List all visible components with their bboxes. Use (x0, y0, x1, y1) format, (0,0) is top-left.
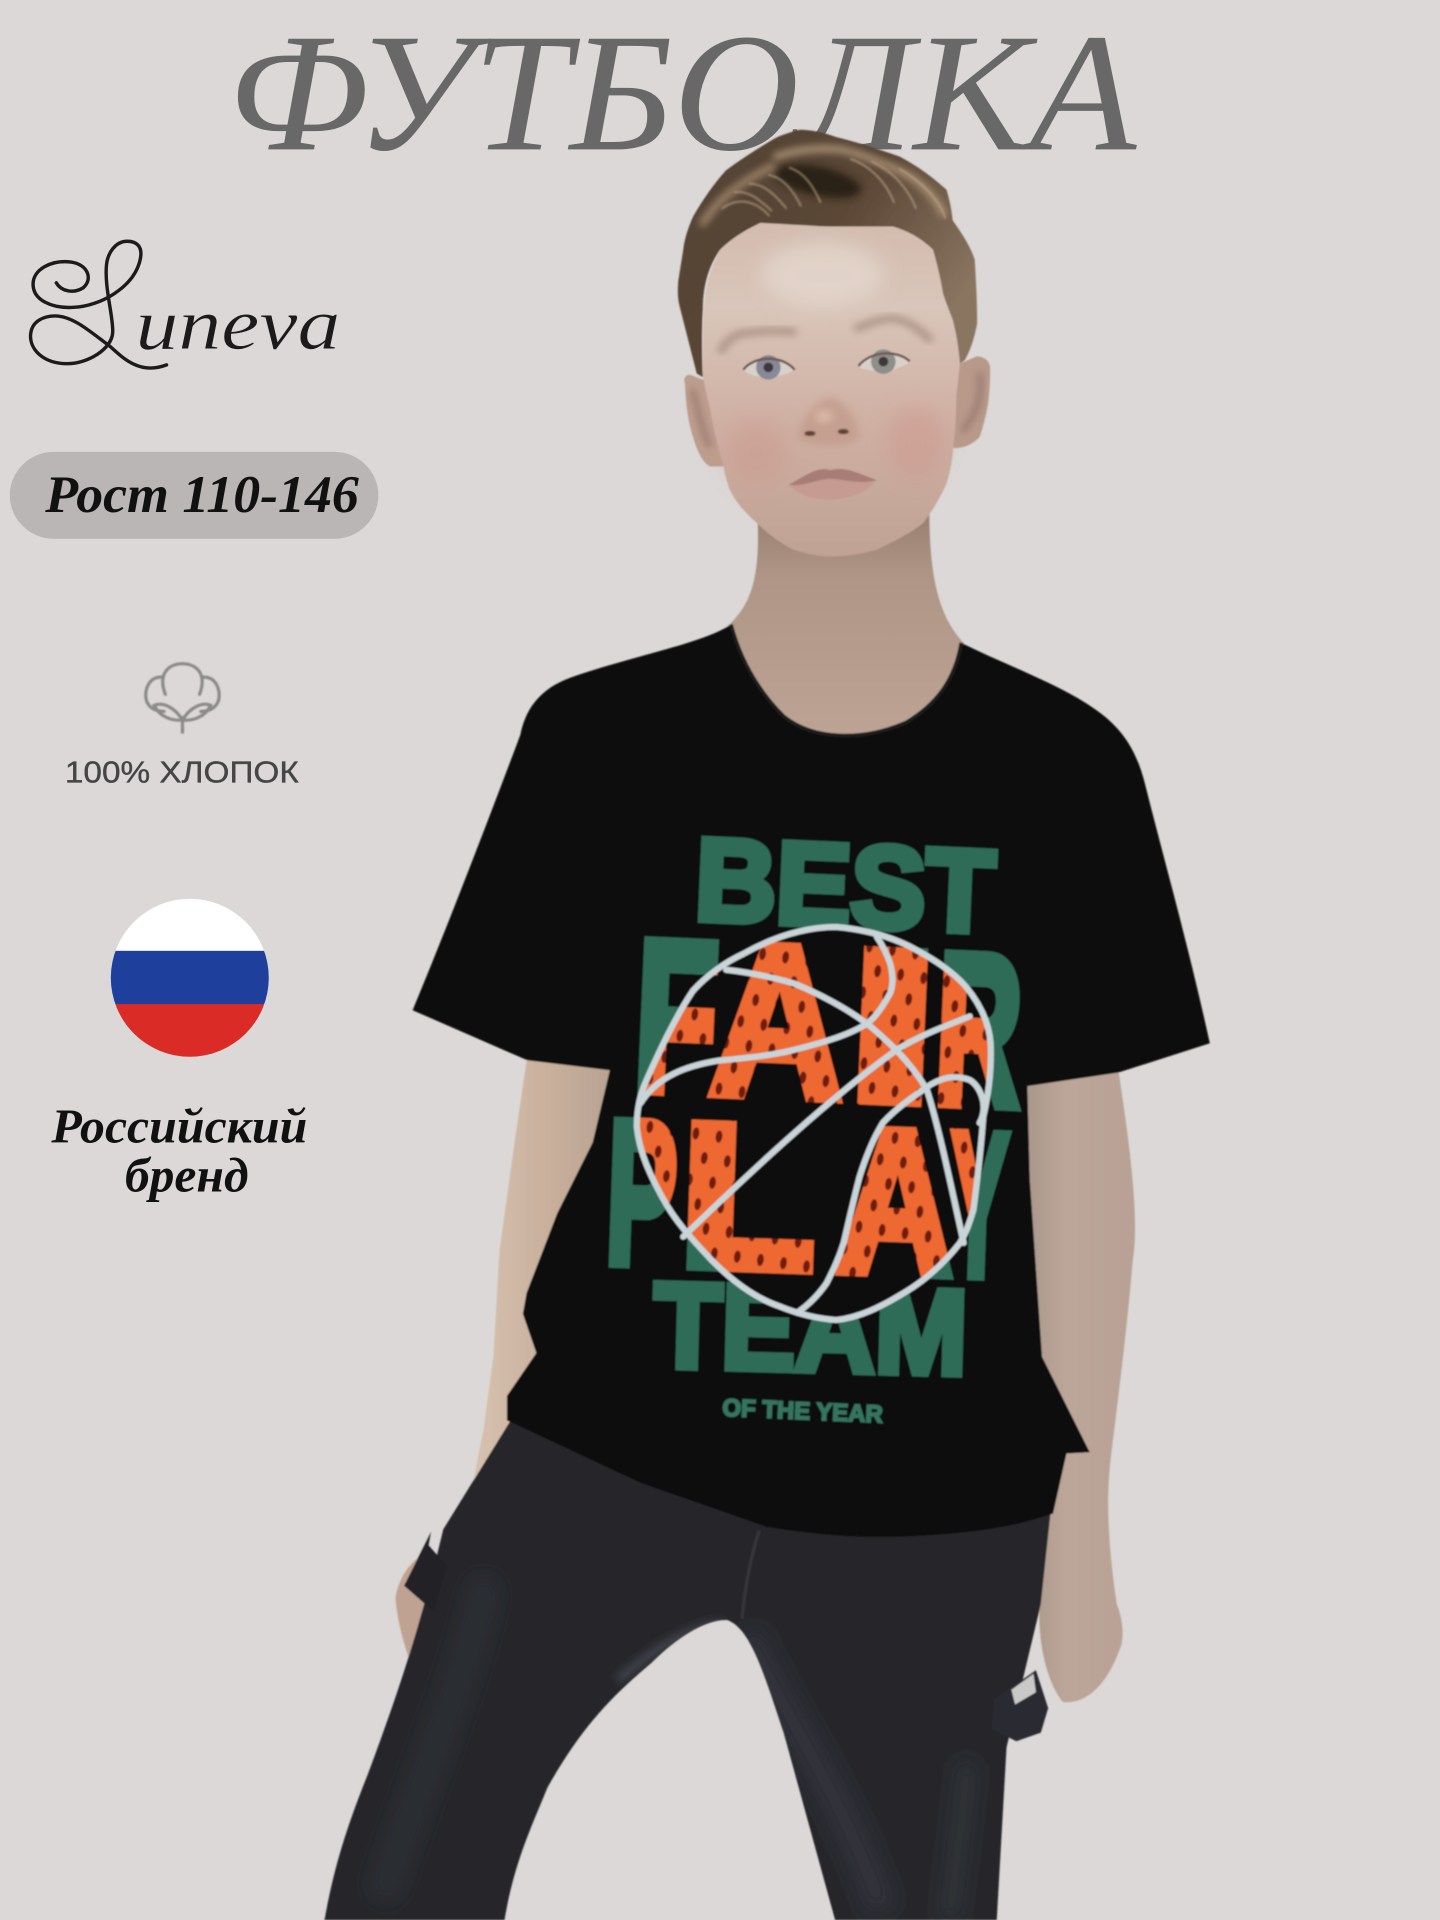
print: fair green: A (708, 900, 849, 1144)
print: fair orange: I (844, 906, 942, 1148)
cheeks (725, 419, 789, 487)
height badge (10, 452, 378, 539)
print: play orange: A (836, 1087, 958, 1317)
nose (797, 397, 860, 446)
print: fair green: I (844, 906, 942, 1148)
hair shading and strands (703, 149, 945, 223)
hair (678, 130, 977, 377)
print: fair orange: R (932, 910, 1026, 1151)
boy figure (324, 130, 1210, 1920)
brand logo: Luneva (134, 284, 340, 365)
height badge: Рост 110-146 (44, 466, 359, 524)
print: play green: L (677, 1081, 819, 1312)
left hand (396, 1555, 447, 1696)
cotton badge (65, 664, 299, 789)
russian brand text: Российский (50, 1098, 307, 1153)
print: fair orange: F (631, 897, 722, 1138)
lips (789, 469, 877, 500)
print: fair orange: A (708, 900, 849, 1144)
print: fair green: F (631, 897, 722, 1138)
icon: cotton (146, 664, 219, 732)
ears (684, 356, 990, 467)
t-shirt (413, 624, 1210, 1537)
title: ФУТБОЛКА (228, 0, 1137, 186)
left pocket flap (404, 1532, 447, 1611)
basketball (604, 897, 1026, 1320)
print: best: BEST (693, 814, 997, 957)
cotton label: 100% ХЛОПОК (65, 755, 299, 789)
ball seams (637, 927, 991, 1320)
neck and chest (722, 502, 970, 747)
print: play green: A (836, 1087, 958, 1317)
left arm (470, 1053, 612, 1496)
russian flag (108, 896, 272, 1059)
shirt print: Y (946, 1091, 1010, 1318)
print: play orange: P (604, 1079, 680, 1307)
eyebrows (721, 331, 793, 350)
print: play orange: L (677, 1081, 819, 1312)
russian brand text: бренд (125, 1147, 249, 1202)
eyes (743, 349, 910, 380)
right forearm and hand (1021, 1068, 1135, 1702)
face (703, 223, 960, 557)
pants (324, 1420, 1051, 1920)
print: of the year: OF THE YEAR (722, 1395, 884, 1429)
right pocket (992, 1670, 1048, 1741)
brand logo (31, 241, 340, 368)
print: team: TEAM (652, 1258, 969, 1400)
shirt print (604, 814, 1026, 1429)
basketball: Y (946, 1091, 1010, 1318)
pocket label (1011, 1674, 1036, 1704)
print: play green: P (604, 1079, 680, 1307)
print: fair green: R (932, 910, 1026, 1151)
